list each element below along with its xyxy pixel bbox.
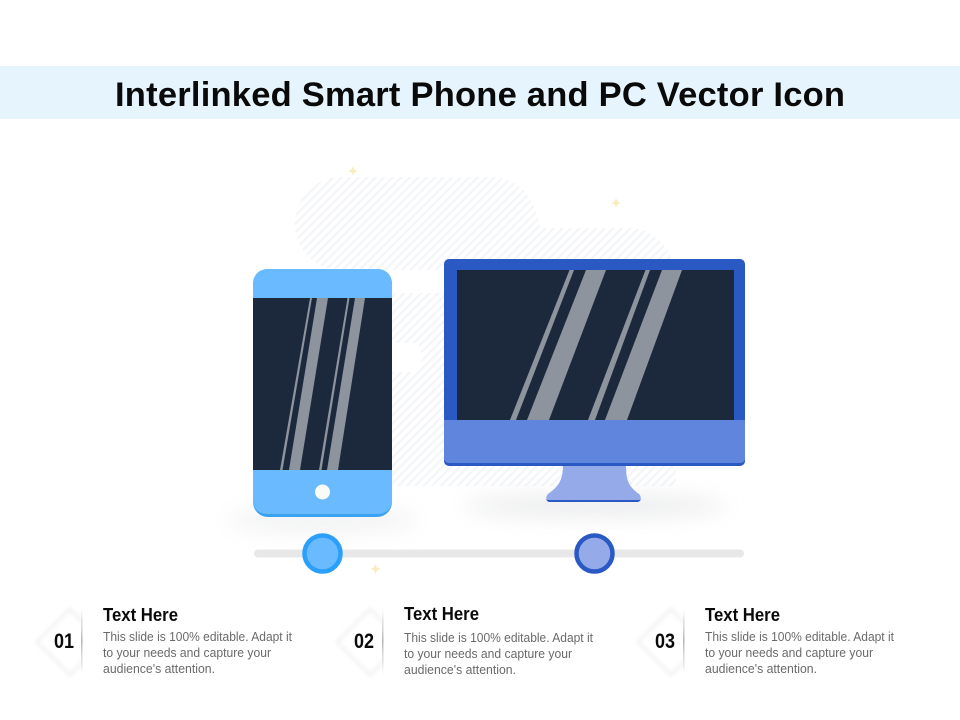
body 03: This slide is 100% editable. Adapt it xyxy=(705,630,894,644)
monitor stand xyxy=(546,464,641,502)
phone screen reflections xyxy=(280,298,365,470)
item 03 xyxy=(638,600,894,680)
body 01 xyxy=(103,630,292,676)
item 02 xyxy=(337,600,593,680)
body 02: to your needs and capture your xyxy=(404,647,572,661)
number badge 03 xyxy=(638,600,705,680)
title band xyxy=(0,66,960,119)
monitor frame xyxy=(444,259,745,466)
sparkle top left xyxy=(348,166,358,176)
sparkles xyxy=(348,166,621,574)
number badge 01: 01 xyxy=(54,630,74,653)
body 02 xyxy=(404,631,593,677)
heading 02: Text Here xyxy=(404,604,479,624)
body 01: to your needs and capture your xyxy=(103,646,271,660)
phone body xyxy=(253,269,392,514)
item 01 xyxy=(37,600,292,680)
desktop monitor icon xyxy=(444,259,745,502)
monitor chin xyxy=(444,420,745,463)
phone edge xyxy=(253,269,392,517)
timeline track xyxy=(254,550,744,558)
number badge 02: 02 xyxy=(354,630,374,653)
body 03: to your needs and capture your xyxy=(705,646,873,660)
timeline marker monitor xyxy=(576,536,612,572)
monitor shadow xyxy=(463,496,727,516)
timeline marker phone xyxy=(304,536,340,572)
heading 03: Text Here xyxy=(705,605,780,625)
title: Interlinked Smart Phone and PC Vector Icon xyxy=(115,76,845,114)
body 01: audience's attention. xyxy=(103,662,215,676)
monitor screen reflections xyxy=(510,270,682,420)
phone screen xyxy=(253,298,392,470)
number badge 02 xyxy=(337,600,404,680)
hatched background cloud xyxy=(295,177,676,486)
number badge 01 xyxy=(37,600,103,680)
phone shadow xyxy=(227,509,417,531)
sparkle bottom xyxy=(370,564,380,574)
number badge 03: 03 xyxy=(655,630,675,653)
body 03 xyxy=(705,630,894,676)
heading 01: Text Here xyxy=(103,605,178,625)
smartphone icon xyxy=(253,269,392,517)
monitor screen xyxy=(457,270,734,420)
body 01: This slide is 100% editable. Adapt it xyxy=(103,630,292,644)
body 03: audience's attention. xyxy=(705,662,817,676)
phone home button xyxy=(315,484,330,500)
body 02: audience's attention. xyxy=(404,663,516,677)
body 02: This slide is 100% editable. Adapt it xyxy=(404,631,593,645)
sparkle top right xyxy=(611,198,621,208)
